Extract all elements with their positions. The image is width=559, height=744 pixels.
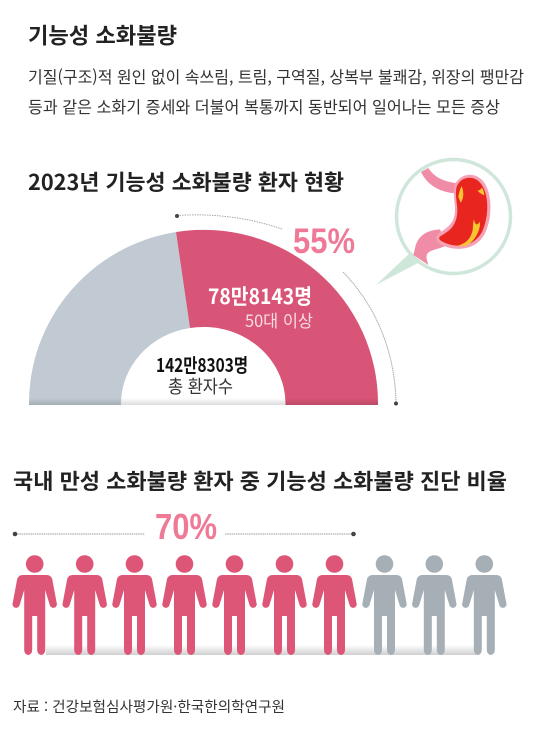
label: 50s and over patients: 50대 이상 bbox=[245, 307, 313, 332]
label: total patients: 142만8303명 bbox=[156, 351, 248, 378]
description text bbox=[28, 64, 524, 118]
people pictogram bbox=[12, 555, 507, 655]
heading: diagnosis ratio: 국내 만성 소화불량 환자 중 기능성 소화불량 진단 비율 bbox=[13, 465, 507, 496]
person 1 bbox=[12, 555, 57, 655]
dotted line with end dots bbox=[13, 532, 356, 536]
person 9 bbox=[412, 555, 457, 655]
heading: 2023 status: 2023년 기능성 소화불량 환자 현황 bbox=[28, 166, 344, 197]
person 8 bbox=[362, 555, 407, 655]
chart segment: rest grey bbox=[29, 232, 190, 405]
title: 기능성 소화불량 bbox=[28, 18, 177, 50]
description text: 등과 같은 소화기 증세와 더불어 복통까지 동반되어 일어나는 모든 증상 bbox=[28, 94, 500, 118]
label: 55 percent: 55% bbox=[293, 222, 355, 261]
source note: 자료 : 건강보험심사평가원·한국한의학연구원 bbox=[13, 696, 285, 717]
chart segment: 55 percent pink bbox=[176, 230, 378, 405]
semicircle chart bbox=[29, 230, 378, 405]
person 4 bbox=[162, 555, 207, 655]
person 7 bbox=[312, 555, 357, 655]
label: 50s and over patients: 78만8143명 bbox=[208, 281, 312, 311]
label: total patients bbox=[156, 351, 248, 399]
label: 70 percent: 70% bbox=[155, 506, 217, 547]
person 3 bbox=[112, 555, 157, 655]
floor shadow bbox=[46, 645, 476, 655]
description text: 기질(구조)적 원인 없이 속쓰림, 트림, 구역질, 상복부 불쾌감, 위장의 팽만감 bbox=[28, 64, 524, 88]
label: total patients: 총 환자수 bbox=[168, 373, 233, 399]
person 6 bbox=[262, 555, 307, 655]
label: 50s and over patients bbox=[208, 281, 313, 332]
person 2 bbox=[62, 555, 107, 655]
person 5 bbox=[212, 555, 257, 655]
icon: stomach in speech bubble bbox=[376, 160, 510, 285]
person 10 bbox=[462, 555, 507, 655]
dotted arc with end dots bbox=[175, 214, 398, 406]
